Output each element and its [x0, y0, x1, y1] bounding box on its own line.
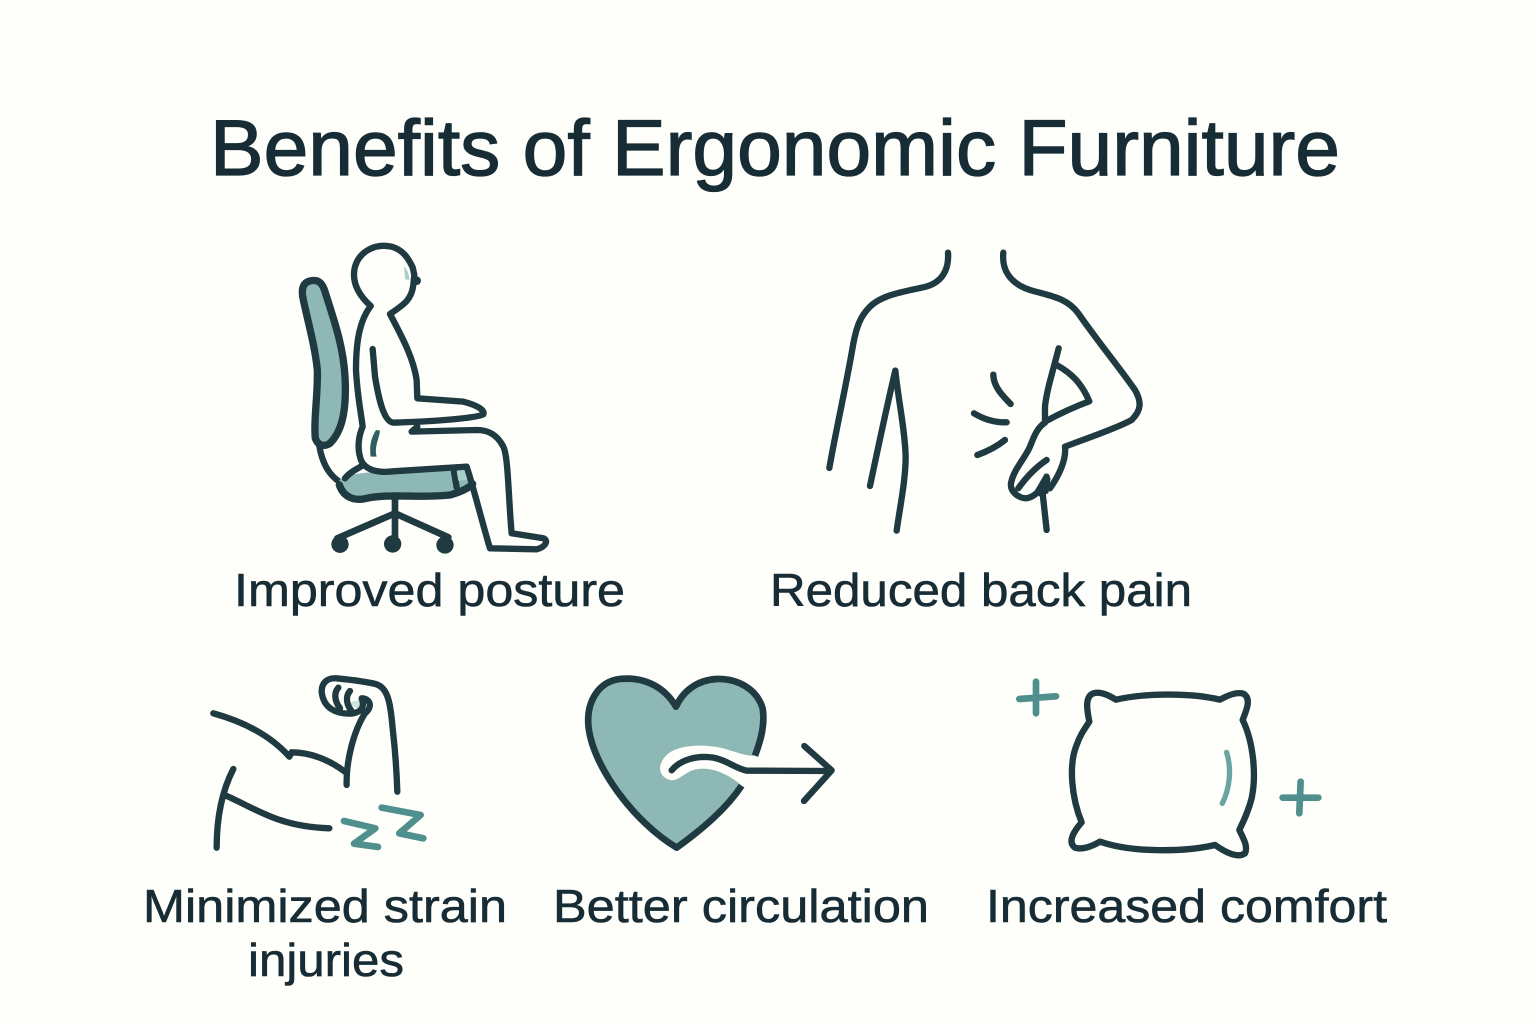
icon: flexed arm with strain marks	[213, 678, 423, 848]
icon: heart with circulation arrow	[588, 679, 832, 848]
icon: seated person on ergonomic chair	[302, 246, 546, 554]
title: Benefits of Ergonomic Furniture	[210, 103, 1340, 192]
label: better circulation: Better circulation	[553, 880, 929, 932]
label: improved posture: Improved posture	[234, 564, 625, 616]
label: minimized strain injuries	[143, 880, 507, 986]
label: minimized strain injuries: injuries	[248, 934, 404, 986]
icon: back with pain marks	[829, 253, 1140, 531]
icon: pillow with plus signs	[1019, 682, 1318, 855]
label: reduced back pain: Reduced back pain	[770, 564, 1192, 616]
label: increased comfort: Increased comfort	[986, 880, 1387, 932]
label: minimized strain injuries: Minimized strain	[143, 880, 507, 932]
